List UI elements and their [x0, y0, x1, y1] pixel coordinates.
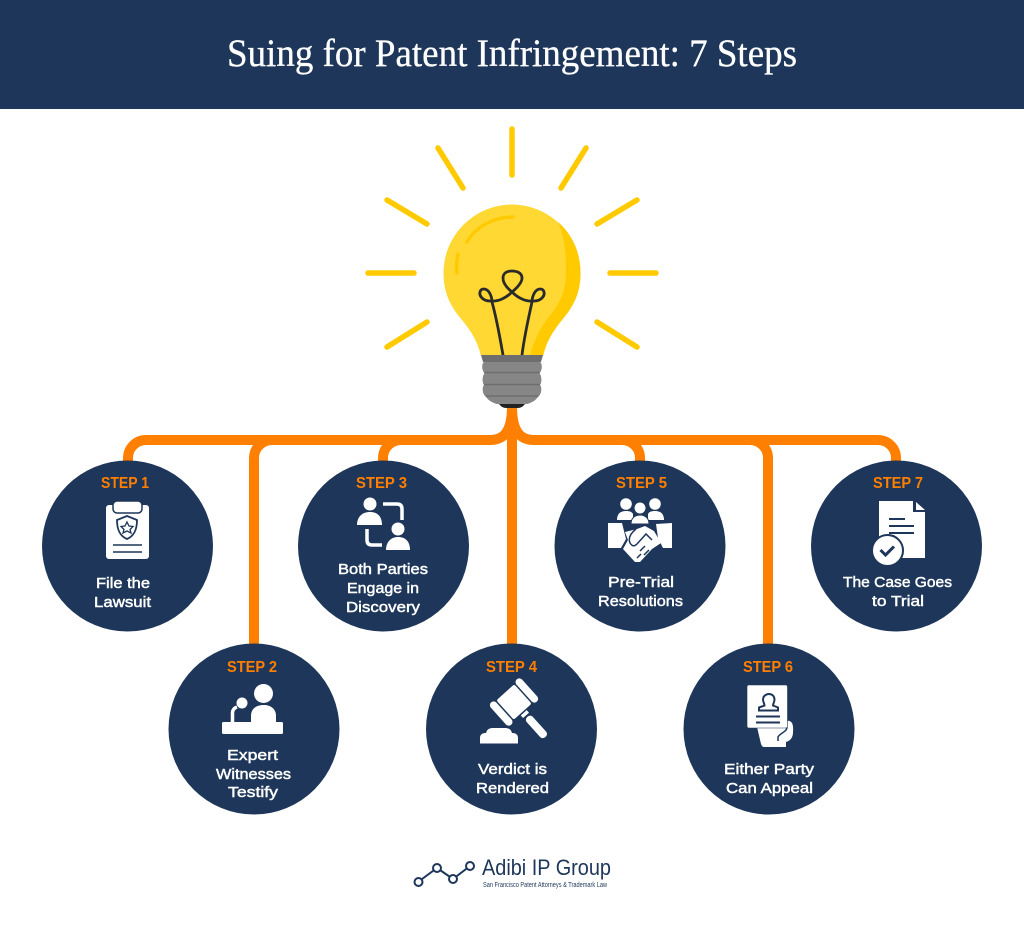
step 7 description: to Trial: [872, 593, 924, 610]
title: Suing for Patent Infringement: 7 Steps: [227, 32, 797, 75]
step 4 description: Verdict is: [478, 761, 547, 778]
panel: step 7: [811, 460, 982, 632]
step 2 description: Witnesses: [216, 766, 291, 783]
icon: hand holding profile document: [747, 685, 793, 747]
panel: step 6: [684, 644, 854, 814]
step 4 description: Rendered: [476, 780, 549, 797]
connector tree: [128, 406, 896, 650]
step 5 label: STEP 5: [616, 475, 667, 492]
logo mark: [414, 862, 474, 886]
logo tagline: San Francisco Patent Attorneys & Trademark Law: [483, 882, 608, 889]
panel: step 1: [42, 460, 213, 632]
step 6 label: STEP 6: [743, 659, 793, 676]
panel: step 4: [426, 644, 597, 814]
step 4 label: STEP 4: [486, 659, 537, 676]
panel: step 2: [168, 644, 340, 814]
step 2 label: STEP 2: [227, 659, 277, 676]
step 1 description: File the: [96, 575, 150, 592]
logo wordmark: Adibi IP Group: [482, 855, 611, 880]
step 1 description: Lawsuit: [94, 594, 152, 611]
icon: two people exchanging: [357, 498, 410, 550]
panel: step 5: [554, 460, 726, 632]
step 1 label: STEP 1: [101, 475, 149, 492]
step 3 label: STEP 3: [356, 475, 407, 492]
icon: light bulb: [444, 205, 580, 408]
step 6 description: Either Party: [724, 761, 815, 778]
panel: step 3: [298, 460, 469, 632]
icon: clipboard with badge: [106, 501, 149, 559]
icon: approved document: [872, 501, 925, 566]
step 6 description: Can Appeal: [726, 780, 813, 797]
header banner: [0, 0, 1024, 109]
step 2 description: Testify: [228, 784, 279, 801]
step 7 description: The Case Goes: [843, 574, 952, 591]
step 5 description: Pre-Trial: [608, 574, 674, 591]
step 5 description: Resolutions: [598, 593, 683, 610]
icon: light bulb rays: [368, 129, 656, 347]
logo: Adibi IP Group: [414, 855, 611, 889]
icon: witness at podium: [222, 684, 283, 734]
icon: group with handshake: [608, 498, 672, 562]
icon: gavel: [480, 677, 561, 751]
step 3 description: Discovery: [346, 599, 421, 616]
step 7 label: STEP 7: [873, 475, 923, 492]
step 3 description: Both Parties: [338, 561, 428, 578]
step 2 description: Expert: [227, 747, 279, 764]
step 3 description: Engage in: [347, 580, 419, 597]
